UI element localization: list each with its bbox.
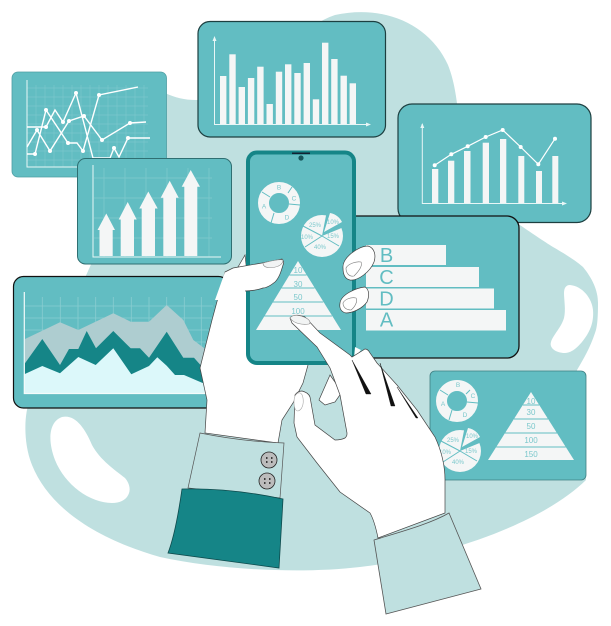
dark sleeve	[168, 489, 283, 568]
smartphone	[248, 152, 354, 363]
pyramid chart small: 50	[527, 422, 536, 431]
cuff button lower	[259, 473, 275, 489]
pyramid chart: 30	[294, 280, 303, 289]
donut chart: D	[285, 214, 290, 222]
card: line chart	[12, 72, 166, 177]
white finger sliver behind phone	[354, 347, 361, 358]
donut chart: A	[262, 204, 267, 210]
pie chart small: 10%	[466, 434, 479, 440]
card: stair chart A B C D: D	[379, 288, 394, 310]
finger gaps	[352, 360, 418, 418]
donut chart: B	[277, 184, 281, 192]
pie chart small: 25%	[447, 438, 460, 444]
right hand hidden finger	[319, 375, 342, 405]
pie chart small: 10%	[439, 450, 452, 456]
card: stair chart A B C D: C	[379, 267, 394, 289]
pie chart small	[439, 428, 486, 472]
pie chart: 15%	[327, 234, 340, 240]
pyramid chart: 10	[294, 266, 303, 275]
donut chart small: D	[463, 412, 468, 419]
donut chart small	[440, 382, 478, 420]
pyramid chart	[256, 261, 341, 330]
thumbnail	[294, 393, 303, 411]
pyramid chart: 50	[294, 293, 303, 302]
pie chart: 25%	[309, 223, 322, 229]
left hand palm	[200, 255, 308, 443]
pyramid chart small: 150	[524, 450, 538, 459]
index fingernail	[290, 315, 310, 324]
pie chart small: 15%	[465, 449, 478, 455]
card: stair chart A B C D: B	[380, 245, 393, 267]
donut chart small: A	[441, 401, 446, 408]
donut chart: C	[292, 196, 297, 202]
left thumb	[215, 259, 284, 300]
left hand finger upper	[343, 246, 375, 280]
pie chart: 10%	[301, 235, 314, 241]
donut chart small: B	[456, 382, 460, 389]
right hand	[290, 315, 445, 538]
right shirt cuff	[374, 513, 481, 614]
left hand finger lower	[340, 287, 369, 313]
cuff button upper	[261, 452, 277, 468]
card: stair chart A B C D	[340, 216, 519, 358]
pie chart: 40%	[314, 245, 327, 251]
card: arrow bar chart	[78, 158, 232, 264]
left shirt cuff	[188, 433, 284, 498]
card: bar and line chart	[398, 104, 591, 222]
pie chart small: 40%	[452, 460, 465, 466]
white bean left	[50, 417, 130, 503]
donut chart small: C	[471, 393, 476, 400]
pie chart	[301, 213, 348, 257]
card: area chart	[14, 276, 228, 408]
white bean right	[551, 285, 593, 353]
card: top bar chart	[198, 22, 386, 137]
card: stair chart A B C D: A	[380, 310, 394, 332]
pie chart: 10%	[327, 220, 340, 226]
pyramid chart: 100	[291, 307, 305, 316]
donut chart	[262, 184, 300, 223]
card: donut pie pyramid	[430, 371, 586, 480]
pyramid chart small: 10	[527, 397, 536, 406]
pyramid chart small	[488, 392, 574, 460]
pyramid chart small: 100	[524, 436, 538, 445]
pyramid chart small: 30	[527, 408, 536, 417]
